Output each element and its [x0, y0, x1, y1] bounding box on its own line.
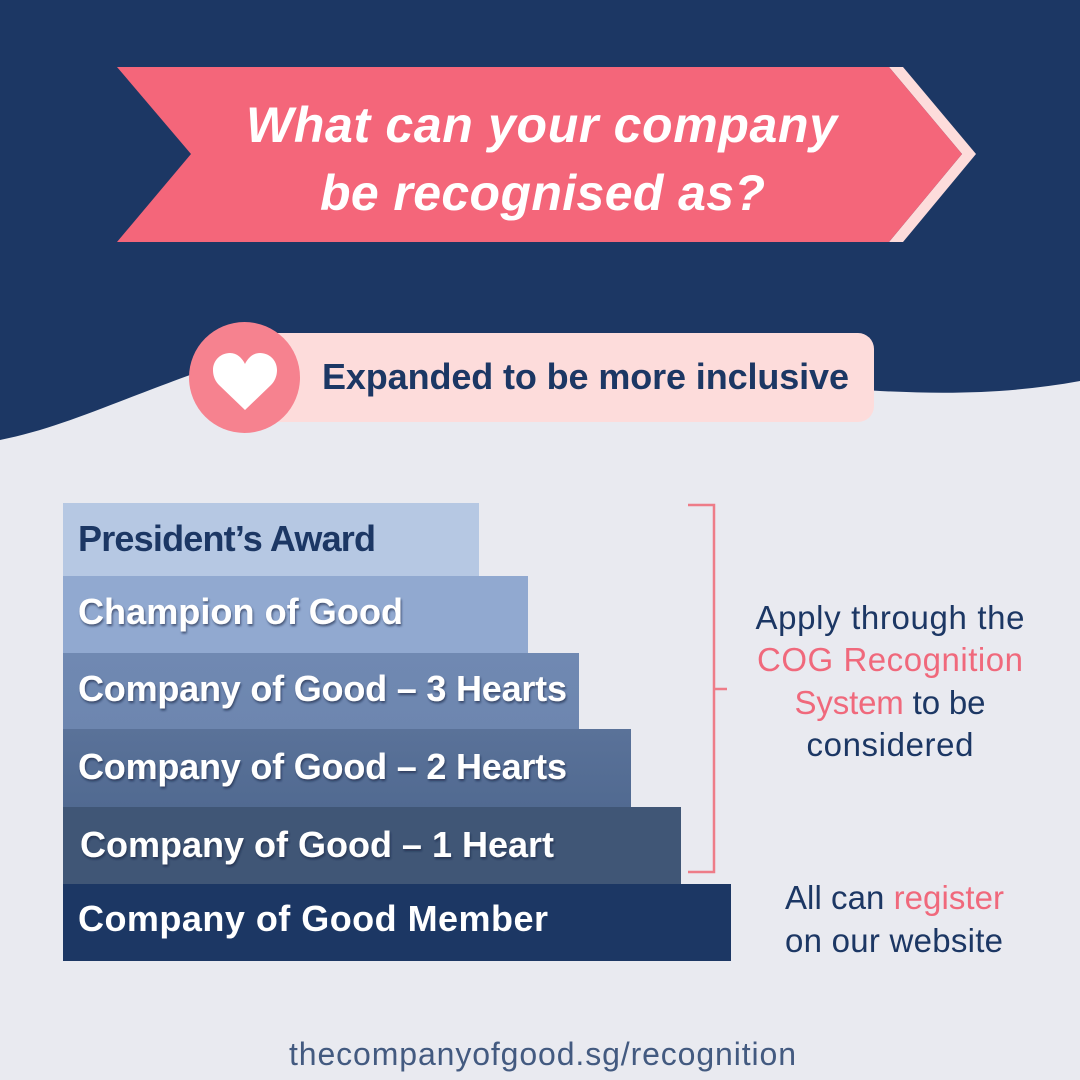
- bracket: [688, 505, 727, 872]
- callout text: Expanded to be more inclusive: [322, 356, 849, 397]
- tier: Company of Good 2 Hearts: [63, 729, 631, 807]
- tier: Champion of Good: Champion of Good: [78, 591, 403, 632]
- tier: Company of Good Member: Company of Good Member: [78, 898, 548, 939]
- tier: President's Award: [63, 503, 479, 576]
- tier: Company of Good Member: [63, 884, 731, 961]
- note: apply through COG Recognition System: Apply through the: [756, 599, 1024, 636]
- callout: expanded to be more inclusive: [189, 322, 874, 433]
- tier: Company of Good 2 Hearts: Company of Good – 2 Hearts: [78, 746, 567, 787]
- website url: thecompanyofgood.sg/recognition: [289, 1036, 796, 1072]
- note: apply through COG Recognition System: System to be: [794, 684, 986, 721]
- staircase chart of recognition tiers: [63, 503, 731, 961]
- tier: Champion of Good: [63, 576, 528, 653]
- tier: President's Award: President’s Award: [78, 518, 376, 559]
- tier: Company of Good 1 Heart: Company of Good – 1 Heart: [80, 824, 554, 865]
- tier: Company of Good 3 Hearts: [63, 653, 579, 729]
- note: apply through COG Recognition System: considered: [806, 726, 974, 763]
- tier: Company of Good 3 Hearts: Company of Good – 3 Hearts: [78, 668, 567, 709]
- note: all can register: [785, 879, 1004, 959]
- dark blue wave background: [0, 0, 1080, 440]
- title text: What can your company: [246, 97, 839, 153]
- note: apply through COG Recognition System: COG Recognition: [757, 641, 1023, 678]
- tier: Company of Good 1 Heart: [63, 807, 681, 884]
- title text: be recognised as?: [320, 165, 765, 221]
- title text: [246, 97, 839, 221]
- icon: heart: [213, 353, 277, 410]
- note: all can register: All can register: [785, 879, 1004, 916]
- note: apply through COG Recognition System: [756, 599, 1024, 763]
- note: all can register: on our website: [785, 922, 1003, 959]
- title banner: [117, 67, 976, 242]
